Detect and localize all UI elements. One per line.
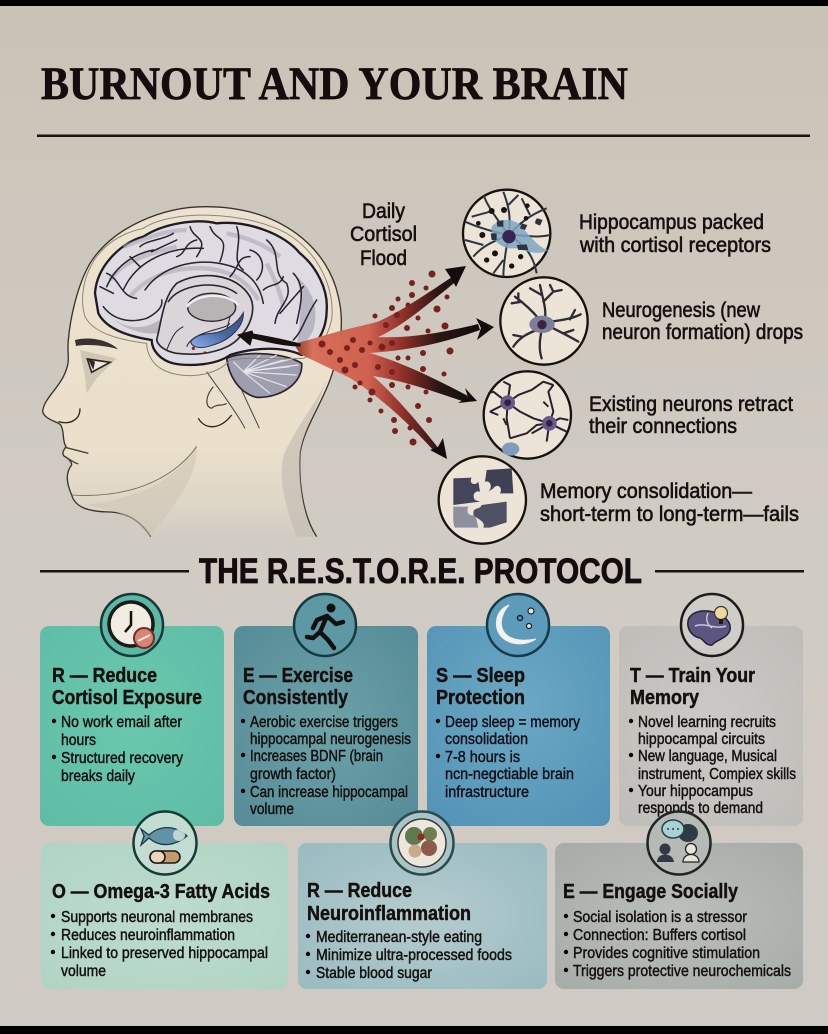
bullets [51, 909, 268, 980]
bullets: Connection: Buffers cortisol [573, 927, 746, 944]
cerebellum [227, 354, 302, 397]
hippocampus [191, 313, 243, 347]
text: hippocampus receptors: with cortisol receptors [579, 233, 771, 257]
text: neurogenesis: Neurogenesis (new [602, 298, 760, 322]
bullets: Provides cognitive stimulation [573, 945, 760, 962]
label: daily cortisol flood: Cortisol [350, 222, 417, 246]
bullets [629, 714, 796, 817]
heading: Cortisol Exposure [52, 687, 202, 709]
heading: Neuroinflammation [307, 903, 471, 925]
heading [630, 665, 755, 709]
heading: O — Omega-3 Fatty Acids [52, 881, 270, 903]
icon: clock [101, 594, 163, 656]
heading [307, 880, 471, 925]
text: memory consolidation: short-term to long-term—fails [540, 502, 799, 526]
heading: S — Sleep [436, 665, 525, 687]
title: BURNOUT AND YOUR BRAIN [41, 58, 628, 110]
bullets: growth factor) [250, 766, 336, 783]
text: memory consolidation [540, 479, 799, 526]
bullets: Stable blood sugar [316, 965, 432, 982]
heading: Consistently [243, 687, 349, 709]
bullets: Minimize ultra-processed foods [316, 947, 512, 964]
bullets: Supports neuronal membranes [61, 909, 253, 926]
bullets: Triggers protective neurochemicals [573, 963, 791, 980]
bullets: New language, Musical [638, 748, 777, 765]
bullets: Can increase hippocampal [250, 784, 408, 801]
bullets: infrastructure [445, 784, 529, 801]
icon: retracting neurons [484, 371, 571, 459]
arrow pointing to hippocampus [238, 331, 300, 346]
head and brain illustration [43, 207, 341, 540]
bullets: Aerobic exercise triggers [250, 714, 398, 731]
bullets: Increases BDNF (brain [250, 748, 383, 765]
bullets: volume [61, 963, 106, 980]
text: neurons retract: their connections [589, 414, 737, 438]
panel: O omega-3 [41, 812, 288, 989]
text: memory consolidation: Memory consolidation— [540, 479, 752, 503]
ear and jaw [198, 415, 232, 427]
icon: salad plate [390, 812, 454, 874]
text: neurogenesis [602, 298, 803, 344]
icon: brain and bulb [681, 594, 743, 656]
heading: T — Train Your [630, 665, 755, 687]
heading: E — Exercise [243, 665, 353, 687]
bullets: Deep sleep = memory [445, 714, 580, 731]
bullets: hippocampal neurogenesis [250, 731, 411, 748]
bullets: No work email after [61, 714, 182, 731]
icon: people talking [648, 812, 710, 874]
bullets: Structured recovery [61, 750, 183, 767]
brainstem [207, 358, 259, 428]
heading: the restore protocol: THE R.E.S.T.O.R.E. PROTOCOL [199, 552, 642, 591]
heading: R — Reduce [307, 880, 412, 902]
bullets: 7-8 hours is [445, 749, 520, 766]
cortisol flood arrows and particles [238, 266, 494, 459]
bullets [241, 714, 411, 818]
bullets: Mediterranean-style eating [316, 929, 482, 946]
icon: broken puzzle [439, 456, 526, 544]
bullets: consolidation [445, 731, 528, 748]
panel: R reduce cortisol [40, 594, 224, 826]
icon: runner [294, 594, 356, 656]
heading: E — Engage Socially [563, 881, 739, 903]
bullets [306, 929, 512, 982]
heading [436, 665, 525, 709]
bullets: Social isolation is a stressor [573, 909, 747, 926]
label: daily cortisol flood [350, 199, 417, 270]
neck and jaw shading [282, 380, 327, 537]
bullets: volume [250, 801, 294, 818]
text: hippocampus receptors: Hippocampus packed [579, 210, 764, 234]
bullets: respopds to demand [638, 800, 763, 817]
panel: T train memory [619, 594, 803, 826]
heading: R — Reduce [52, 665, 157, 687]
text: neurogenesis: neuron formation) drops [602, 320, 803, 344]
heading: Protection [436, 687, 525, 709]
bullets: hippocampal circuits [638, 731, 765, 748]
heading [52, 665, 202, 709]
bullets: ncn-negctiable brain [445, 766, 574, 783]
bullets: Linked to preserved hippocampal [61, 945, 268, 962]
text: neurons retract [589, 392, 793, 438]
face features [75, 338, 118, 349]
bullets [564, 909, 791, 980]
icon: fish and capsule [134, 812, 196, 874]
text: hippocampus receptors [579, 210, 771, 257]
bullets: Reduces neuroinflammation [61, 927, 235, 944]
heading [243, 665, 353, 709]
panel: E exercise [234, 594, 418, 826]
icon: moon and stars [487, 594, 549, 656]
arrowheads [445, 266, 466, 287]
bullets: hours [61, 732, 96, 749]
panel: S sleep [427, 594, 610, 826]
brain [83, 215, 332, 376]
bullets [436, 714, 580, 801]
bullets: Novel learning recruits [638, 714, 776, 731]
icon: neuron [500, 277, 588, 365]
bullets: instrument, Compiex skills [638, 766, 796, 783]
heading: Memory [630, 687, 700, 709]
panel: R reduce neuroinflammation [298, 812, 547, 989]
icon: cortisol receptors neuron [463, 190, 550, 277]
head profile [43, 207, 341, 540]
bullets [52, 714, 183, 785]
text: neurons retract: Existing neurons retract [589, 392, 793, 416]
panel: E engage socially [555, 812, 803, 989]
bullets: breaks daily [61, 768, 135, 785]
label: daily cortisol flood: Daily [362, 199, 405, 223]
bullets: Your hippocampus [638, 783, 753, 800]
label: daily cortisol flood: Flood [360, 246, 407, 270]
